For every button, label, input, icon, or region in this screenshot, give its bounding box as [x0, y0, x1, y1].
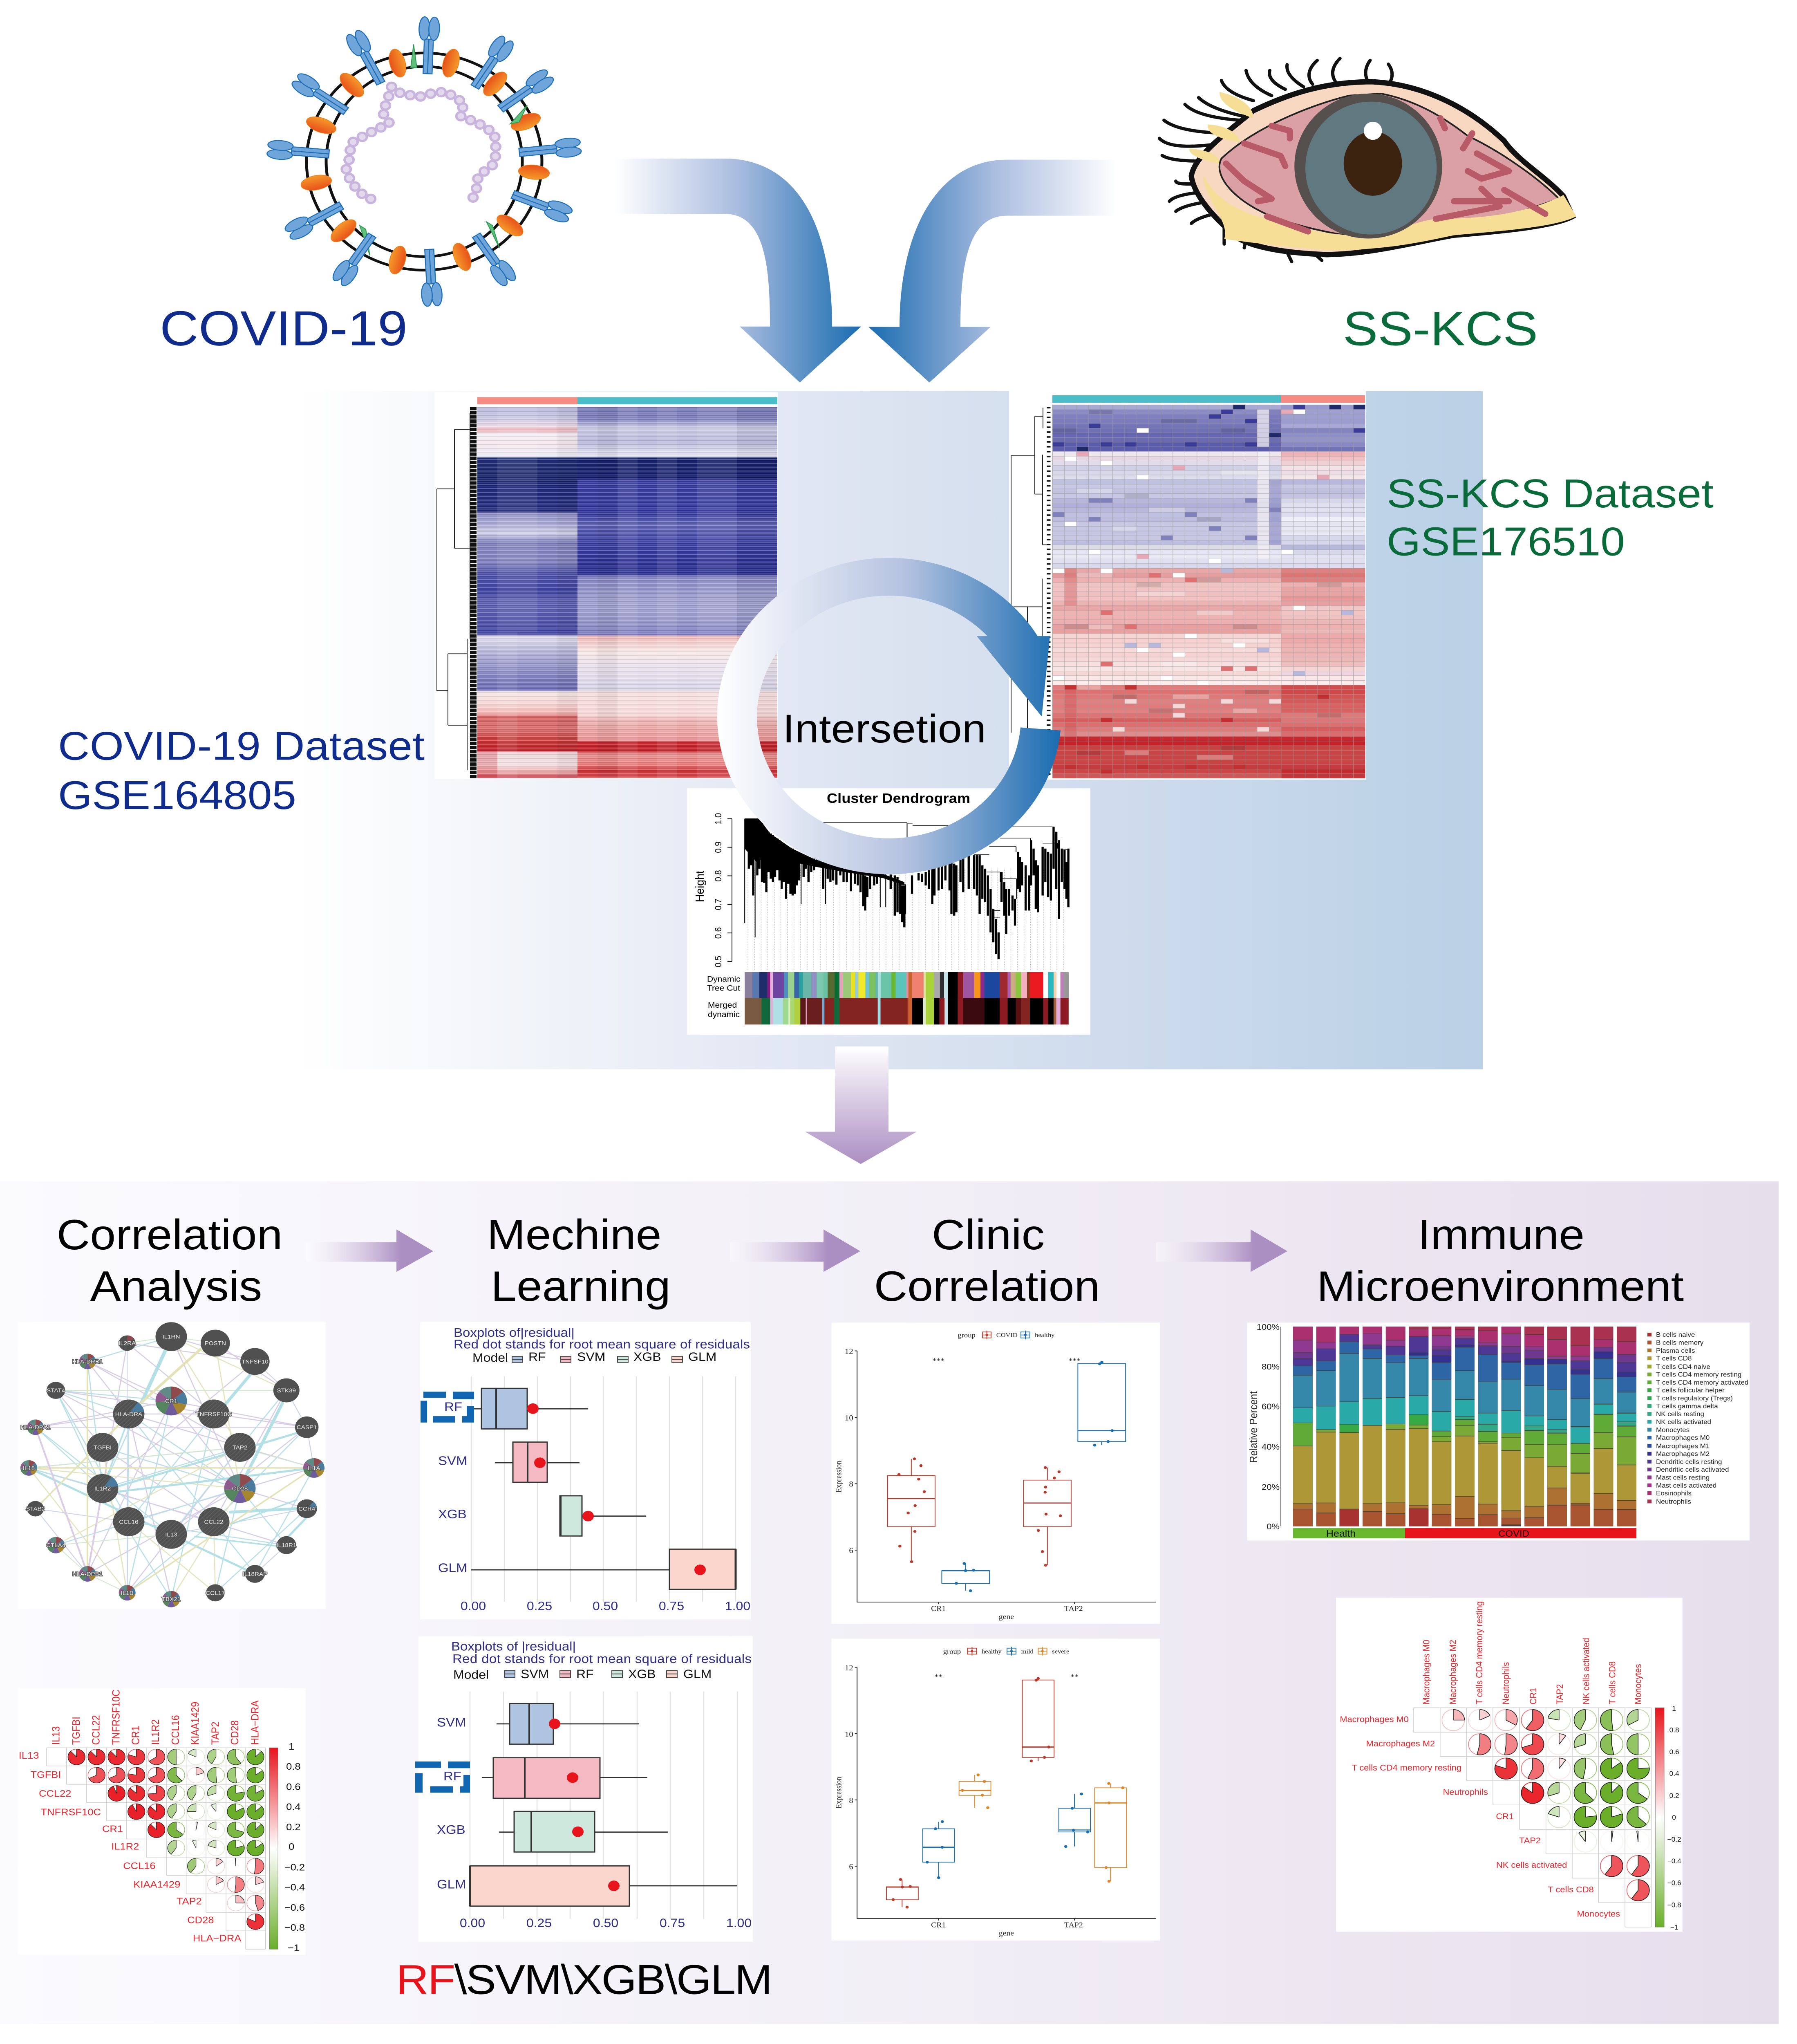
axis text: TAP2 — [1064, 1605, 1083, 1613]
legend: T cells regulatory (Tregs) — [1656, 1395, 1733, 1402]
boxes — [470, 1703, 737, 1906]
row labels: KIAA1429 — [133, 1880, 180, 1890]
colour scale labels: 0.8 — [286, 1762, 301, 1772]
boxplot: residuals, SVM first: 0.75 — [660, 1916, 685, 1930]
legend: Macrophages M0 — [1656, 1434, 1710, 1441]
dendrogram tree — [745, 819, 1069, 971]
healthy boxes — [886, 1680, 1054, 1907]
boxplot: residuals, SVM first — [415, 1636, 753, 1942]
correlation plot: immune cells and genes — [1336, 1598, 1683, 1932]
boxplot: residuals, SVM first: 1.00 — [726, 1916, 752, 1930]
COVID boxes — [888, 1459, 1071, 1565]
legend: NK cells activated — [1656, 1419, 1711, 1425]
severe boxes — [959, 1775, 1127, 1881]
axis text: 10 — [845, 1414, 853, 1422]
axis labels: XGB — [437, 1822, 465, 1837]
row labels: TAP2 — [177, 1896, 202, 1907]
arrow: datasets to analyses — [805, 1047, 917, 1164]
dendrogram title: Cluster Dendrogram — [827, 791, 970, 806]
colour scale labels: 0.6 — [1669, 1748, 1679, 1756]
network: gene interaction — [18, 1322, 326, 1609]
sample dots — [892, 1677, 1050, 1909]
axis text — [835, 1664, 1083, 1937]
column labels: CR1 — [130, 1726, 142, 1745]
network labels: CASP1 — [297, 1425, 317, 1431]
y axis: 100% — [1257, 1323, 1280, 1332]
axis text: 6 — [849, 1546, 853, 1555]
axis text: TAP2 — [1064, 1921, 1083, 1929]
legend: Plasma cells — [1656, 1347, 1695, 1354]
legend: healthy — [1035, 1332, 1055, 1338]
dendrogram height axis: 0.6 — [714, 927, 723, 939]
group strip: COVID — [1498, 1529, 1529, 1539]
network labels: TNFSF10 — [242, 1359, 269, 1365]
axis text: gene — [999, 1613, 1014, 1621]
row labels: Neutrophils — [1443, 1788, 1488, 1797]
column labels: Monocytes — [1634, 1664, 1643, 1704]
heading: machine learning: Learning — [491, 1262, 671, 1310]
legend — [1647, 1331, 1748, 1505]
legend: Model — [453, 1668, 489, 1681]
network labels: STAB2 — [26, 1506, 45, 1512]
heading: SS-KCS: SS-KCS — [1343, 302, 1538, 356]
colour scale labels: −0.4 — [1667, 1858, 1681, 1865]
row labels: IL1R2 — [111, 1841, 139, 1852]
legend: T cells CD8 — [1656, 1355, 1692, 1362]
column labels — [1422, 1601, 1643, 1704]
column labels: NK cells activated — [1582, 1638, 1591, 1704]
sample dots — [897, 1457, 1062, 1567]
heading: clinic correlation: Clinic — [932, 1211, 1045, 1258]
network labels: IL18R1 — [276, 1542, 296, 1549]
axis text: 12 — [845, 1347, 853, 1356]
legend: T cells gamma delta — [1656, 1403, 1719, 1410]
icon: inflamed eye — [1159, 58, 1576, 262]
axis text: Expression — [835, 1460, 844, 1493]
axis text: 8 — [849, 1480, 853, 1488]
column labels: CR1 — [1529, 1688, 1538, 1704]
heading: immune microenvironment: Immune — [1418, 1211, 1584, 1258]
label: COVID-19 dataset — [58, 723, 425, 818]
plot title: Red dot stands for root mean square of residuals — [452, 1652, 752, 1666]
column labels: TAP2 — [210, 1721, 222, 1745]
axis text: 6 — [849, 1862, 853, 1871]
network labels: TBX21 — [162, 1596, 181, 1603]
axis labels — [437, 1715, 466, 1891]
axis labels: GLM — [438, 1561, 468, 1575]
legend — [958, 1331, 1055, 1339]
boxplot: residuals, SVM first: 0.25 — [526, 1916, 552, 1930]
legend: Mast cells resting — [1656, 1474, 1710, 1481]
arrow: COVID-19 to heatmaps — [615, 159, 861, 383]
legend: Dendritic cells resting — [1656, 1458, 1722, 1466]
legend: B cells naive — [1656, 1331, 1695, 1338]
column labels: TAP2 — [1555, 1684, 1565, 1704]
network labels: IL1B — [121, 1590, 134, 1596]
colour scale labels: 0 — [289, 1842, 294, 1852]
row labels: T cells CD8 — [1548, 1885, 1594, 1894]
dendrogram height axis: 0.7 — [714, 899, 723, 910]
boxplot: residuals, RF best: 0.25 — [527, 1599, 552, 1613]
row labels: Monocytes — [1577, 1910, 1620, 1918]
column labels: CCL16 — [170, 1715, 181, 1745]
highlight: RF dashed box — [421, 1392, 474, 1423]
network labels: STAT4 — [47, 1388, 65, 1394]
legend: T cells CD4 memory activated — [1656, 1379, 1748, 1386]
legend: XGB — [633, 1350, 661, 1364]
network labels: HLA-DPA1 — [20, 1425, 50, 1431]
colour scale labels: −0.2 — [1667, 1836, 1681, 1843]
plot title: Boxplots of |residual| — [451, 1639, 576, 1653]
plot title — [454, 1325, 750, 1351]
column labels — [51, 1690, 261, 1745]
arrow: step 1 to 2 — [306, 1229, 433, 1272]
network labels: HLA-DRB1 — [72, 1359, 103, 1365]
boxplot: residuals, RF best: 1.00 — [725, 1599, 750, 1613]
arrow: step 2 to 3 — [730, 1229, 860, 1272]
dendrogram height axis: 0.5 — [714, 956, 723, 967]
colour scale labels: 0.6 — [286, 1782, 301, 1792]
axis labels: SVM — [437, 1715, 466, 1729]
legend: GLM — [683, 1667, 712, 1681]
network labels: CTLA4 — [46, 1542, 65, 1549]
network labels: IL18RAP — [242, 1571, 267, 1578]
colour scale labels: −0.8 — [1667, 1901, 1681, 1909]
boxplot: CR1 and TAP2, COVID vs healthy — [832, 1322, 1160, 1624]
network labels: IL1R2 — [94, 1486, 111, 1492]
legend: RF — [528, 1350, 546, 1364]
network labels: CCR4 — [298, 1506, 315, 1512]
correlation plot: hub genes — [18, 1688, 305, 1955]
colour scale labels — [1667, 1705, 1681, 1931]
axis labels: RF — [444, 1400, 462, 1414]
legend: Macrophages M2 — [1656, 1450, 1710, 1457]
healthy boxes — [942, 1364, 1126, 1591]
axis text — [835, 1347, 1083, 1621]
legend: COVID — [996, 1332, 1018, 1338]
stacked bar chart: immune cell fractions — [1247, 1322, 1750, 1540]
y axis: 60% — [1262, 1402, 1280, 1411]
label: COVID-19 dataset: GSE164805 — [58, 773, 296, 818]
legend: healthy — [982, 1648, 1002, 1655]
legend: RF — [576, 1667, 594, 1681]
row labels: CCL16 — [123, 1861, 156, 1871]
legend: Model — [472, 1351, 508, 1365]
plot title — [451, 1639, 752, 1666]
boxplot: residuals, RF best: 0.50 — [593, 1599, 618, 1613]
row labels: TAP2 — [1519, 1836, 1541, 1845]
colour scale labels — [284, 1741, 305, 1953]
group strip: Health — [1326, 1529, 1356, 1539]
colour scale labels: −0.2 — [284, 1862, 305, 1873]
network labels: CR1 — [165, 1399, 177, 1405]
label: COVID-19 dataset: COVID-19 Dataset — [58, 723, 425, 769]
row labels: CR1 — [1496, 1812, 1514, 1821]
heading: machine learning — [487, 1211, 671, 1310]
colour bar labels: dynamic — [708, 1011, 740, 1019]
heading: machine learning: Mechine — [487, 1211, 662, 1258]
heading: correlation analysis — [57, 1211, 282, 1310]
dendrogram height axis: 1.0 — [714, 813, 723, 825]
legend: T cells CD4 naive — [1656, 1363, 1710, 1370]
legend: GLM — [688, 1350, 716, 1364]
legend: T cells CD4 memory resting — [1656, 1371, 1741, 1378]
panel: analyses background — [0, 1181, 1779, 2024]
colour scale labels: −0.4 — [284, 1883, 305, 1893]
network labels: TAP2 — [233, 1445, 247, 1451]
legend: Dendritic cells activated — [1656, 1466, 1729, 1473]
arrow: step 3 to 4 — [1156, 1229, 1287, 1272]
label: intersection: Intersetion — [783, 706, 986, 751]
row labels: TNFRSF10C — [41, 1807, 101, 1818]
heatmap: COVID-19 dataset — [434, 392, 778, 779]
row labels: TGFBI — [30, 1770, 61, 1780]
axis labels: GLM — [437, 1877, 466, 1891]
colour scale labels: −1 — [1670, 1923, 1678, 1931]
highlight: RF dashed box — [415, 1762, 470, 1793]
heading: clinic correlation — [874, 1211, 1100, 1310]
legend: SVM — [577, 1350, 605, 1364]
label: selected models: RF\SVM\XGB\GLM — [396, 1956, 772, 2003]
legend: mild — [1021, 1648, 1034, 1655]
legend: Monocytes — [1656, 1426, 1690, 1434]
axis text: *** — [1068, 1357, 1081, 1365]
icon: coronavirus — [266, 17, 582, 307]
column labels: IL1R2 — [150, 1719, 161, 1745]
column labels: HLA−DRA — [250, 1700, 261, 1745]
axis text: 10 — [845, 1730, 853, 1739]
axis text: *** — [932, 1357, 944, 1365]
axis text: ** — [1070, 1673, 1079, 1681]
boxplot: residuals, SVM first: 0.00 — [460, 1916, 485, 1930]
plot title: Boxplots of|residual| — [454, 1325, 575, 1340]
legend: severe — [1052, 1648, 1069, 1655]
colour scale labels: 0 — [1672, 1814, 1676, 1821]
legend: Neutrophils — [1656, 1498, 1691, 1505]
axis text: CR1 — [931, 1605, 946, 1613]
column labels: CD28 — [229, 1720, 241, 1745]
dendrogram height axis — [693, 813, 732, 967]
positive correlation pies — [1442, 1710, 1649, 1901]
network labels: POSTN — [205, 1340, 226, 1347]
boxes — [471, 1388, 736, 1589]
negative correlation pies — [1548, 1710, 1649, 1852]
boxplot: residuals, SVM first: 0.50 — [593, 1916, 618, 1930]
legend — [943, 1647, 1069, 1656]
colour scale labels: 1 — [1672, 1705, 1676, 1712]
boxplot: residuals, RF best: 0.00 — [461, 1599, 486, 1613]
heading: immune microenvironment — [1317, 1211, 1684, 1310]
row labels — [1340, 1715, 1620, 1918]
group strip — [1293, 1528, 1636, 1539]
network labels: HLA-DPB1 — [72, 1571, 103, 1578]
colour scale labels: −0.8 — [284, 1923, 305, 1933]
column labels: Macrophages M2 — [1448, 1640, 1458, 1704]
y axis title: Relative Percent — [1248, 1391, 1260, 1463]
colour scale labels: 0.4 — [286, 1802, 301, 1812]
column labels: T cells CD4 memory resting — [1475, 1601, 1484, 1704]
y axis — [1257, 1323, 1280, 1531]
legend: Eosinophils — [1656, 1490, 1692, 1497]
stacked bars — [1303, 1327, 1627, 1526]
colour scale labels: 0.2 — [286, 1822, 301, 1833]
heading: correlation analysis: Analysis — [90, 1262, 262, 1310]
legend: group — [958, 1331, 976, 1339]
dendrogram height axis: 0.8 — [714, 870, 723, 882]
y axis: 0% — [1267, 1522, 1280, 1531]
colour scale labels: 1 — [289, 1741, 294, 1752]
negative correlation pies — [168, 1749, 264, 1874]
network labels: TNFRSF10C — [196, 1411, 232, 1418]
column labels: Macrophages M0 — [1422, 1640, 1432, 1704]
axis labels: RF — [443, 1769, 461, 1783]
row labels: CR1 — [102, 1824, 123, 1834]
axis text: CR1 — [931, 1921, 946, 1929]
legend: Mast cells activated — [1656, 1482, 1716, 1489]
row labels — [19, 1750, 242, 1944]
network labels: HLA-DRA — [115, 1411, 142, 1418]
column labels: CCL22 — [90, 1715, 102, 1745]
network nodes — [27, 1322, 318, 1601]
row labels: T cells CD4 memory resting — [1352, 1764, 1461, 1773]
colour scale — [269, 1748, 278, 1949]
row labels: Macrophages M0 — [1340, 1715, 1409, 1724]
axis labels — [438, 1400, 468, 1575]
column labels: KIAA1429 — [190, 1702, 201, 1745]
column labels: Neutrophils — [1501, 1662, 1511, 1704]
axis labels: XGB — [438, 1507, 467, 1521]
dendrogram height axis: 0.9 — [714, 842, 723, 853]
legend — [472, 1350, 716, 1365]
row labels: CD28 — [187, 1915, 214, 1925]
column labels: IL13 — [51, 1726, 62, 1745]
y axis: 20% — [1262, 1483, 1280, 1492]
boxplot: residuals, RF best — [420, 1322, 751, 1619]
heading: correlation analysis: Correlation — [57, 1211, 282, 1258]
axis labels: SVM — [438, 1454, 468, 1468]
label: SS-KCS dataset: SS-KCS Dataset — [1387, 471, 1714, 516]
module colour bars — [745, 972, 1069, 1024]
colour bar labels: Tree Cut — [707, 984, 740, 993]
legend: B cells memory — [1656, 1339, 1704, 1346]
arrow: intersection ring — [717, 558, 1061, 874]
network edges — [29, 1337, 314, 1599]
mild boxes — [923, 1794, 1090, 1878]
heading: clinic correlation: Correlation — [874, 1262, 1100, 1310]
colour scale labels: 0.8 — [1669, 1726, 1679, 1734]
network labels — [20, 1334, 320, 1603]
row labels: NK cells activated — [1496, 1861, 1567, 1870]
colour bar labels: Dynamic — [707, 975, 741, 984]
network labels: IL1RN — [162, 1334, 180, 1340]
positive correlation pies — [68, 1749, 264, 1930]
heatmap: SS-KCS dataset — [1009, 391, 1366, 780]
colour scale labels: −0.6 — [284, 1903, 305, 1913]
plot title: Red dot stands for root mean square of residuals — [454, 1337, 750, 1351]
colour bar labels — [707, 975, 741, 1019]
legend: XGB — [628, 1667, 656, 1681]
RMSE dots — [527, 1403, 706, 1575]
network labels: STK39 — [277, 1388, 296, 1394]
axis text: gene — [999, 1929, 1014, 1937]
network labels: IL1A — [307, 1465, 320, 1472]
colour scale labels: 0.4 — [1669, 1770, 1679, 1777]
boxplot: CR1 and TAP2, healthy mild severe — [832, 1638, 1160, 1941]
network labels: CCL22 — [204, 1519, 224, 1525]
axis text: ** — [934, 1673, 942, 1681]
colour scale labels: −1 — [288, 1943, 300, 1953]
arrow: SS-KCS to heatmaps — [868, 160, 1117, 383]
heading: COVID-19: COVID-19 — [160, 301, 407, 356]
network labels: IL2RA — [119, 1340, 136, 1347]
legend: group — [943, 1647, 961, 1655]
row labels: IL13 — [19, 1750, 39, 1761]
label: SS-KCS dataset: GSE176510 — [1387, 519, 1625, 564]
network labels: IL13 — [165, 1532, 177, 1538]
RMSE dots — [549, 1719, 620, 1891]
network labels: CCL17 — [206, 1590, 225, 1596]
label: SS-KCS dataset — [1387, 471, 1714, 564]
legend: NK cells resting — [1656, 1411, 1704, 1418]
network labels: CD28 — [232, 1486, 248, 1492]
column labels: TGFBI — [71, 1717, 82, 1745]
legend: T cells follicular helper — [1656, 1387, 1725, 1394]
network labels: IL18 — [23, 1465, 35, 1472]
legend — [453, 1667, 712, 1681]
colour scale labels: −0.6 — [1667, 1879, 1681, 1887]
colour scale labels: 0.2 — [1669, 1792, 1679, 1800]
colour bar labels: Merged — [708, 1001, 737, 1010]
heading: immune microenvironment: Microenvironment — [1317, 1262, 1684, 1310]
y axis: 80% — [1262, 1363, 1280, 1372]
column labels: TNFRSF10C — [110, 1690, 122, 1745]
network labels: CCL16 — [119, 1519, 139, 1525]
row labels: HLA−DRA — [193, 1933, 242, 1944]
column labels: T cells CD8 — [1608, 1661, 1618, 1704]
boxplot: residuals, RF best: 0.75 — [659, 1599, 684, 1613]
y axis: 40% — [1262, 1443, 1280, 1452]
row labels: CCL22 — [39, 1788, 71, 1799]
axis text: 12 — [845, 1664, 853, 1672]
row labels: Macrophages M2 — [1366, 1739, 1435, 1748]
dendrogram height axis: Height — [693, 870, 706, 902]
network labels: TGFBI — [94, 1445, 112, 1451]
axis text: 8 — [849, 1796, 853, 1805]
colour scale — [1655, 1708, 1664, 1927]
legend: SVM — [521, 1667, 549, 1681]
dendrogram panel — [687, 788, 1090, 1035]
axis text: Expression — [835, 1776, 844, 1809]
panel: datasets background — [297, 391, 1483, 1069]
legend: Macrophages M1 — [1656, 1443, 1710, 1450]
